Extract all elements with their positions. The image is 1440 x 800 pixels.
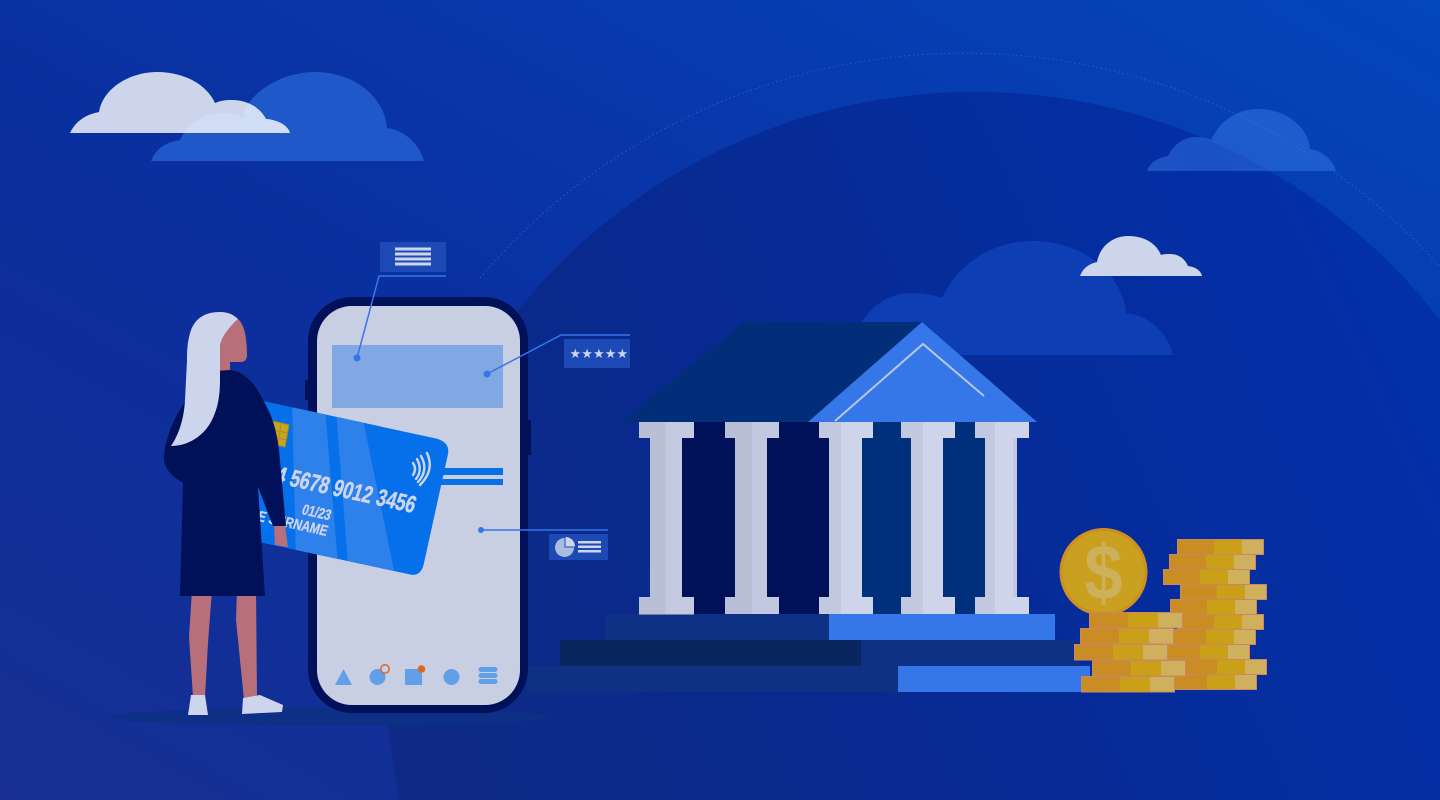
card expiry: 01/23 <box>300 502 333 524</box>
card chip <box>273 421 289 447</box>
icon: dollar coin: $ <box>1084 528 1123 616</box>
card holder name: NAME SURNAME <box>229 502 330 540</box>
cloud: white upper left <box>70 72 290 133</box>
phone side buttons <box>305 380 531 455</box>
icon: square with dot badge <box>405 665 425 685</box>
cloud: large blue behind bank <box>840 241 1173 355</box>
dotted orbit arc <box>480 53 1440 278</box>
column 5 <box>975 422 1029 614</box>
column 4 <box>901 422 955 614</box>
icon: menu <box>478 667 498 684</box>
phone screen <box>317 306 520 705</box>
person hand <box>274 526 288 547</box>
cloud: blue upper left <box>151 72 424 161</box>
person neck and face <box>218 319 247 374</box>
person shoes <box>188 695 283 715</box>
card stripes <box>292 400 396 580</box>
callout: pie chart <box>478 527 608 560</box>
person legs <box>189 590 257 700</box>
smartphone <box>305 297 531 713</box>
screen banner <box>332 345 503 408</box>
cloud: white right <box>1080 236 1202 276</box>
person <box>164 312 288 715</box>
credit card <box>258 401 448 575</box>
icon: dollar coin <box>1060 528 1148 616</box>
column 1 <box>639 422 694 614</box>
phone body <box>308 297 528 713</box>
callout: star rating <box>484 335 630 378</box>
icon: triangle <box>335 669 352 685</box>
phone navigation icons <box>335 665 498 685</box>
person hair <box>171 312 238 446</box>
person dress <box>164 370 286 596</box>
background circle <box>387 92 1440 800</box>
bank steps <box>527 614 1090 692</box>
bank building <box>527 322 1090 692</box>
bank walls <box>680 422 986 614</box>
icon: circle <box>444 669 460 685</box>
cloud: blue upper right <box>1147 109 1336 171</box>
screen text bars <box>420 468 503 485</box>
icon: contactless waves <box>413 453 430 485</box>
column 2 <box>725 422 779 614</box>
icon: circle with ring badge <box>370 665 389 685</box>
ground shadow <box>110 708 550 726</box>
coins: right stack <box>1163 539 1267 690</box>
coins: left stack <box>1074 612 1186 692</box>
callout: text lines <box>354 242 446 362</box>
card number: 1234 5678 9012 3456 <box>243 456 420 519</box>
column 3 <box>819 422 873 614</box>
bank roof <box>621 322 1037 422</box>
callout: star rating: ★★★★★ <box>570 347 628 362</box>
